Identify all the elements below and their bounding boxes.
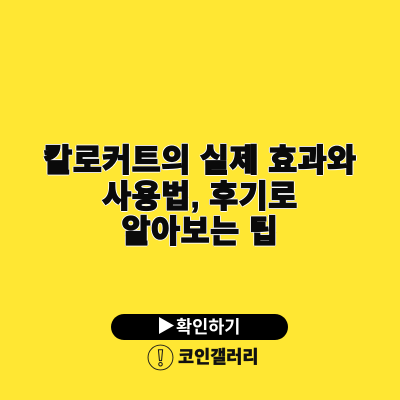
- icon: exclamation circle: [148, 344, 174, 370]
- title: [43, 142, 357, 249]
- button label: 확인하기: [176, 317, 240, 337]
- button: 확인하기: [111, 314, 288, 340]
- icon: play triangle: [159, 317, 174, 334]
- brand name: 코인갤러리: [178, 347, 258, 367]
- title line 1: 칼로커트의 실제 효과와: [43, 142, 357, 178]
- title line 3: 알아보는 팁: [122, 213, 278, 249]
- brand: 코인갤러리: [148, 344, 258, 370]
- title line 2: 사용법, 후기로: [102, 178, 298, 214]
